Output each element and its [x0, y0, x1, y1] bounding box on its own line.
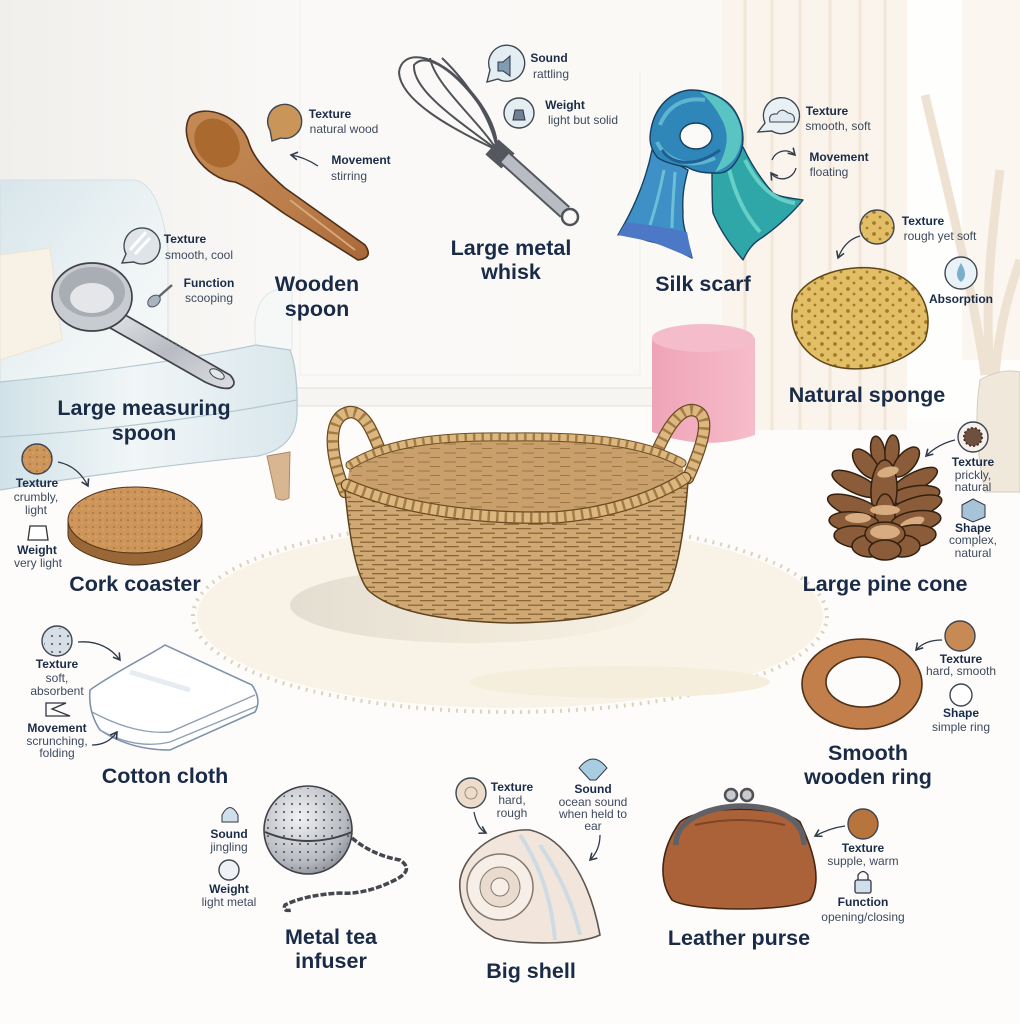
- whisk shape: [399, 57, 578, 225]
- cloth labels: Movement: [27, 721, 87, 735]
- cloth labels: soft,: [46, 671, 68, 685]
- item: cork coaster: [14, 444, 202, 596]
- curtain and window: [722, 0, 1020, 430]
- rug: [193, 520, 827, 712]
- cone shape: [824, 434, 945, 560]
- cone labels: natural: [955, 546, 991, 560]
- purse shape: [663, 789, 816, 909]
- infuser labels: [202, 808, 256, 909]
- infuser labels: jingling: [209, 840, 248, 854]
- cloth shape: [90, 645, 258, 750]
- item: big shell: [456, 759, 627, 983]
- scarf labels: Texture: [806, 104, 849, 118]
- spoon shape: [185, 110, 368, 260]
- ring shape: [802, 639, 922, 729]
- scarf labels: [758, 98, 871, 179]
- coaster labels: [14, 444, 88, 570]
- coaster labels: Weight: [17, 543, 57, 557]
- sponge heading: Natural sponge: [789, 383, 945, 407]
- scarf labels: Movement: [809, 150, 869, 164]
- cone labels: Shape: [955, 521, 991, 535]
- whisk labels: Weight: [545, 98, 585, 112]
- whisk labels: light but solid: [548, 113, 618, 127]
- sponge labels: Texture: [902, 214, 945, 228]
- coaster labels: Texture: [16, 476, 59, 490]
- item: whisk: [399, 45, 618, 284]
- spoon heading: Wooden: [275, 272, 359, 296]
- sponge shape: [792, 268, 928, 369]
- measuring spoon heading: spoon: [112, 421, 176, 445]
- purse labels: [815, 809, 905, 924]
- item: tea infuser: [202, 786, 406, 973]
- spoon labels: [268, 104, 391, 183]
- pampas plant and vase: [925, 95, 1020, 492]
- sponge labels: Absorption: [929, 292, 993, 306]
- wicker basket: [333, 410, 704, 623]
- infuser labels: light metal: [202, 895, 256, 909]
- whisk labels: Sound: [530, 51, 568, 65]
- ring labels: Texture: [940, 652, 983, 666]
- item: leather purse: [663, 789, 905, 950]
- shell labels: Sound: [574, 782, 612, 796]
- shell labels: rough: [497, 806, 527, 820]
- purse labels: supple, warm: [827, 854, 899, 868]
- armchair: [0, 180, 297, 500]
- item: pine cone: [803, 422, 997, 596]
- item: natural sponge: [789, 210, 993, 407]
- infuser shape: [264, 786, 406, 910]
- coaster labels: crumbly,: [14, 490, 58, 504]
- item: measuring spoon: [52, 228, 234, 445]
- cone heading: Large pine cone: [803, 572, 967, 596]
- spoon labels: stirring: [331, 169, 367, 183]
- measuring spoon heading: Large measuring: [57, 396, 231, 420]
- purse labels: Texture: [842, 841, 885, 855]
- whisk heading: whisk: [480, 260, 541, 284]
- item: silk scarf: [618, 90, 871, 296]
- coaster shape: [68, 487, 202, 565]
- whisk labels: rattling: [533, 67, 569, 81]
- infuser labels: Weight: [209, 882, 249, 896]
- spoon heading: spoon: [285, 297, 349, 321]
- ring labels: simple ring: [932, 720, 990, 734]
- ring labels: hard, smooth: [926, 664, 996, 678]
- shell labels: [456, 759, 627, 860]
- shell labels: hard,: [498, 793, 526, 807]
- purse labels: Function: [838, 895, 888, 909]
- coaster labels: very light: [14, 556, 63, 570]
- scarf heading: Silk scarf: [655, 272, 752, 296]
- scarf labels: smooth, soft: [805, 119, 871, 133]
- ring heading: Smooth: [828, 741, 908, 765]
- item: wooden spoon: [185, 104, 391, 321]
- cloth labels: Texture: [36, 657, 79, 671]
- cone labels: Texture: [952, 455, 995, 469]
- whisk heading: Large metal: [451, 236, 571, 260]
- purse heading: Leather purse: [668, 926, 810, 950]
- infuser labels: Sound: [210, 827, 248, 841]
- coaster labels: light: [25, 503, 48, 517]
- cloth labels: [26, 626, 120, 760]
- sponge labels: [838, 210, 993, 306]
- whisk labels: [487, 45, 618, 128]
- cone labels: prickly,: [955, 468, 991, 482]
- ring labels: [916, 621, 996, 734]
- sponge labels: rough yet soft: [904, 229, 977, 243]
- coaster heading: Cork coaster: [69, 572, 201, 596]
- cloth heading: Cotton cloth: [102, 764, 228, 788]
- cone labels: natural: [955, 480, 991, 494]
- ring labels: Shape: [943, 706, 979, 720]
- cone labels: complex,: [949, 533, 997, 547]
- infuser heading: infuser: [295, 949, 367, 973]
- pink stool: [652, 324, 755, 443]
- spoon labels: Texture: [309, 107, 352, 121]
- spoon labels: Movement: [331, 153, 391, 167]
- cloth labels: folding: [39, 746, 75, 760]
- shell labels: Texture: [491, 780, 534, 794]
- measuring spoon labels: Function: [184, 276, 234, 290]
- measuring spoon labels: Texture: [164, 232, 207, 246]
- measuring spoon labels: smooth, cool: [165, 248, 233, 262]
- cloth labels: absorbent: [30, 684, 84, 698]
- item: cotton cloth: [26, 626, 258, 788]
- purse labels: opening/closing: [821, 910, 905, 924]
- shell shape: [460, 830, 600, 943]
- shell labels: ear: [584, 819, 602, 833]
- spoon labels: natural wood: [310, 122, 378, 136]
- infuser heading: Metal tea: [285, 925, 378, 949]
- measuring spoon labels: scooping: [185, 291, 233, 305]
- scarf shape: [618, 90, 803, 260]
- ring heading: wooden ring: [803, 765, 932, 789]
- measuring spoon labels: [122, 228, 234, 309]
- shell labels: when held to: [558, 807, 627, 821]
- cone labels: [926, 422, 997, 560]
- item: wooden ring: [802, 621, 996, 789]
- shell heading: Big shell: [486, 959, 576, 983]
- shell labels: ocean sound: [559, 795, 627, 809]
- cloth labels: scrunching,: [26, 734, 88, 748]
- scarf labels: floating: [810, 165, 848, 179]
- measuring spoon shape: [52, 263, 234, 388]
